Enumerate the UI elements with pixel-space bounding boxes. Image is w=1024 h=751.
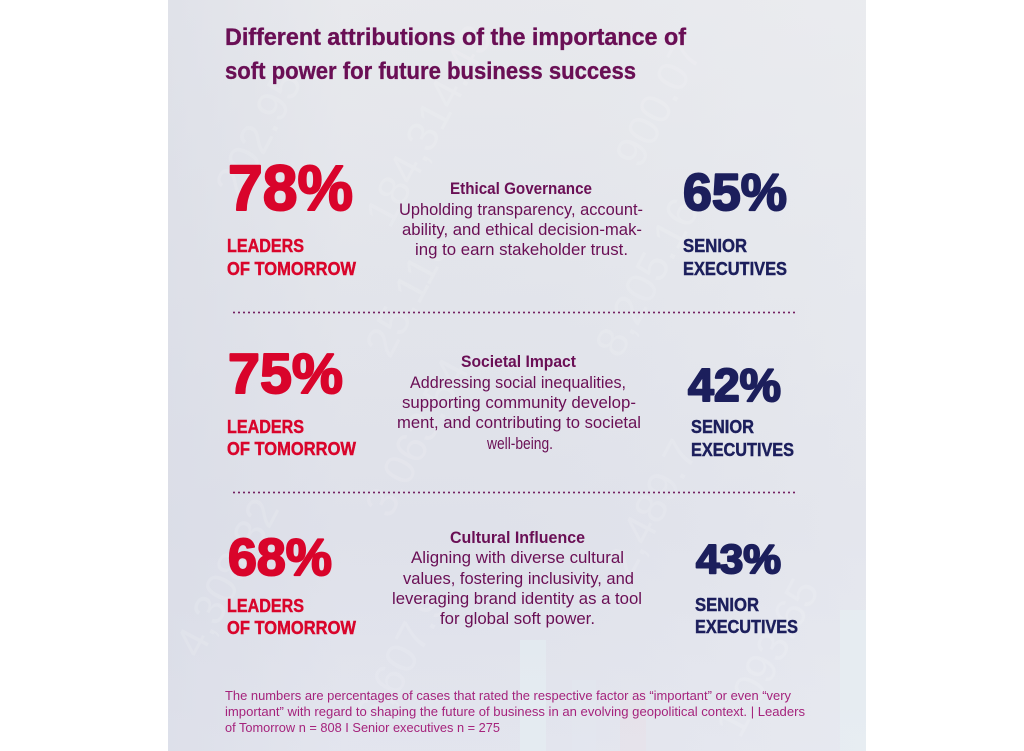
stat: senior executives 65%: SENIOR [683,236,747,256]
text: societal impact description: ment, and contributing to societal [397,413,641,432]
panel: background: 8,205.16 [586,190,709,365]
text: ethical governance description: Upholding transparency, account- [399,200,643,219]
stat: senior executives 42% [688,359,794,460]
panel: background [166,0,866,751]
stat: senior executives 65%: EXECUTIVES [683,259,787,279]
stat: leaders 78%: 78% [228,152,353,224]
stat: senior executives 42%: 42% [688,359,781,411]
stat: senior executives 65% [683,164,787,279]
stat: leaders 75%: OF TOMORROW [227,439,356,459]
panel: background: 25,118. [356,215,466,365]
stat: leaders 78%: OF TOMORROW [227,259,356,279]
stat: leaders 68%: LEADERS [227,596,304,616]
stat: leaders 68%: OF TOMORROW [227,618,356,638]
title: soft power for future business success [225,58,636,85]
footnote [225,688,806,735]
text: societal impact description: Addressing social inequalities, [410,373,626,392]
stat: leaders 68%: 68% [228,529,332,587]
text: ethical governance description: Ethical Governance [450,179,592,198]
stat: senior executives 42%: EXECUTIVES [691,440,794,460]
panel: background: 1,093.65 [706,570,829,745]
stat: senior executives 43%: EXECUTIVES [695,617,798,637]
stat: leaders 68% [227,529,356,638]
panel: background: 2,489.7 [596,432,708,585]
stat: leaders 78% [227,152,356,279]
row: cultural influence [227,528,798,638]
stat: senior executives 65%: 65% [683,164,787,222]
text: cultural influence description: leveraging brand identity as a tool [392,589,642,608]
panel: background: 202.95 [206,63,312,205]
title [225,24,687,85]
panel: background: 184,314.43 [356,17,502,235]
stat: leaders 75% [227,342,356,459]
panel: background: 4,308.32 [166,490,289,665]
text: societal impact description [397,352,641,453]
text: ethical governance description: ability, and ethical decision-mak- [402,220,642,239]
row: ethical governance [227,152,787,279]
stat: senior executives 43% [695,536,798,637]
text: cultural influence description: Cultural Influence [450,528,585,547]
text: ethical governance description [399,179,643,259]
panel: background: 6,607.9 [346,582,458,735]
footnote: important” with regard to shaping the future of business in an evolving geopolitical context. | Leaders [225,704,806,719]
panel: background: 900.07 [606,33,712,175]
text: cultural influence description: for global soft power. [440,609,595,628]
stat: leaders 78%: LEADERS [227,236,304,256]
text: ethical governance description: ing to earn stakeholder trust. [415,240,628,259]
row: societal impact [227,342,794,460]
stat: senior executives 43%: SENIOR [695,595,759,615]
footnote: of Tomorrow n = 808 I Senior executives n = 275 [225,720,500,735]
text: cultural influence description [392,528,642,628]
stat: senior executives 43%: 43% [696,536,781,582]
text: cultural influence description: values, fostering inclusivity, and [403,569,634,588]
text: societal impact description: Societal Impact [461,352,576,371]
stat: senior executives 42%: SENIOR [691,417,754,437]
title: Different attributions of the importance of [225,24,687,51]
stat: leaders 75%: LEADERS [227,417,304,437]
text: societal impact description: well-being. [486,434,553,453]
stat: leaders 75%: 75% [228,342,343,406]
text: societal impact description: supporting community develop- [402,393,636,412]
footnote: The numbers are percentages of cases that rated the respective factor as “important” or even “very [225,688,791,703]
panel: background: 3,063.54 [356,350,479,525]
text: cultural influence description: Aligning with diverse cultural [411,548,624,567]
